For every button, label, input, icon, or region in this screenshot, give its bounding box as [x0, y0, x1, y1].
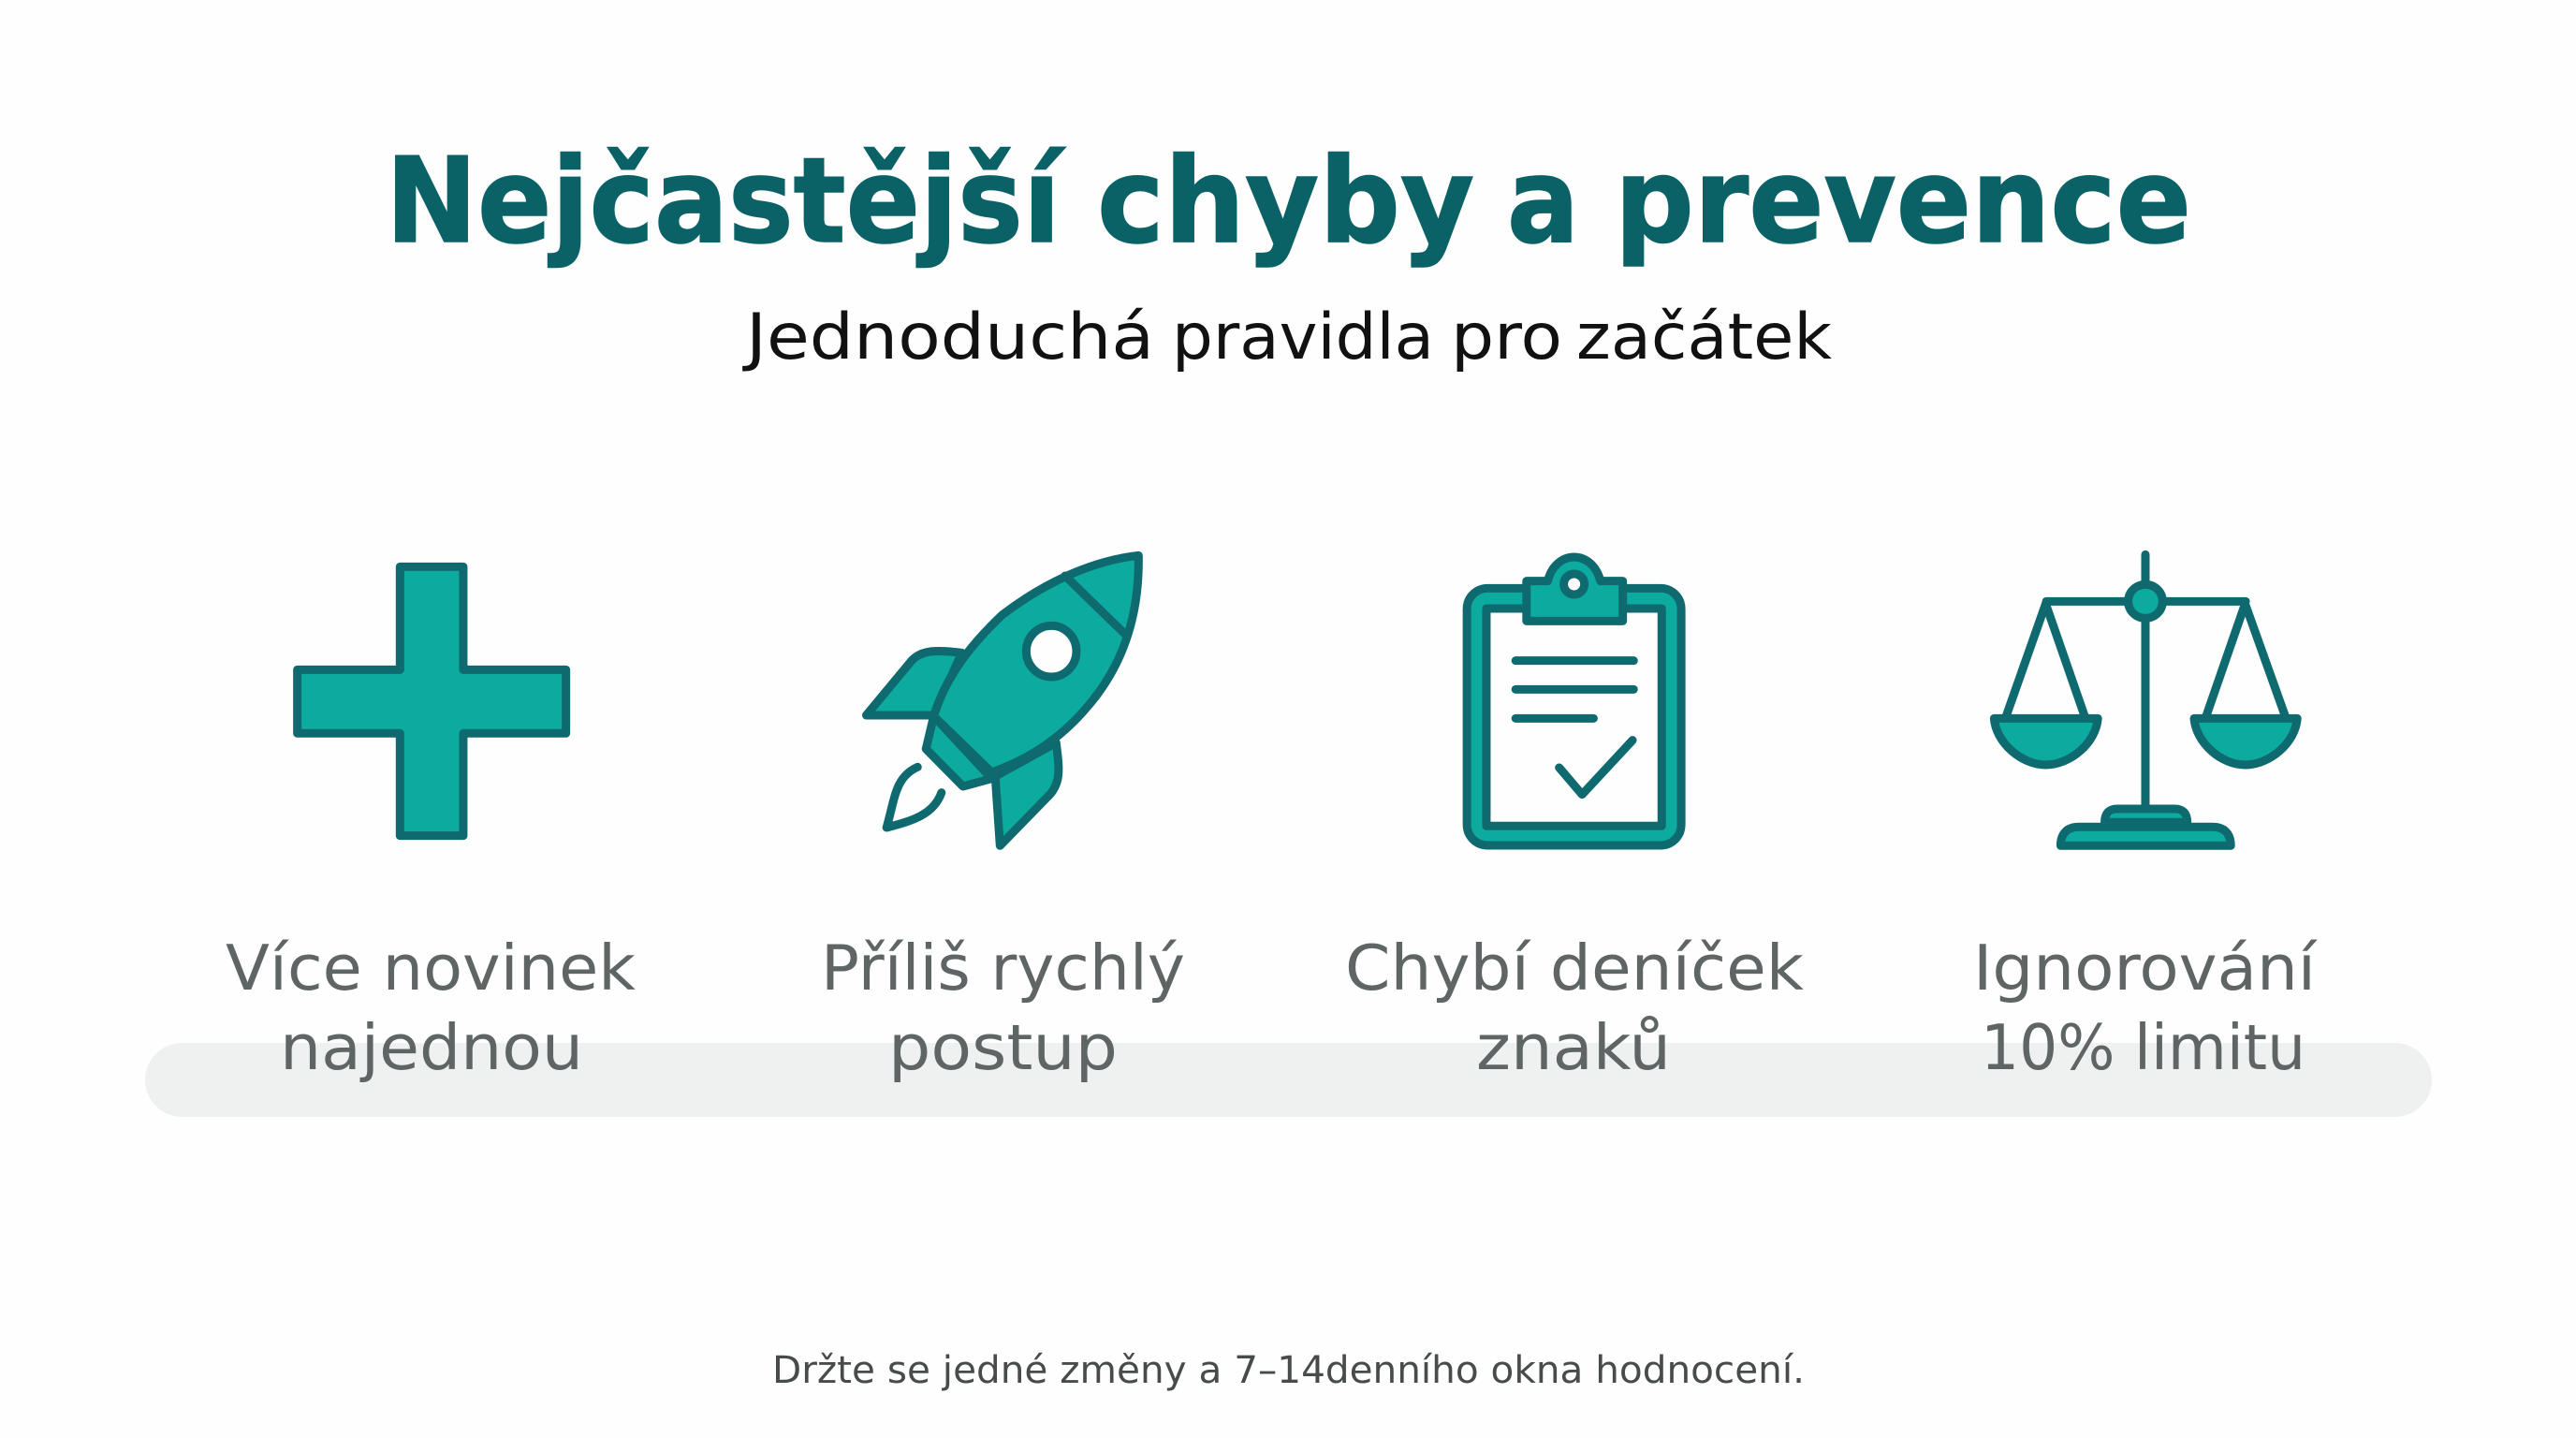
clipboard board	[1467, 588, 1681, 845]
label: Ignorování 10% limitu: Ignorování	[1973, 932, 2318, 1005]
label: Více novinek najednou: Více novinek	[226, 932, 636, 1005]
background bar behind labels	[145, 1043, 2432, 1117]
subtitle: začátek	[1576, 301, 1833, 374]
title	[386, 132, 2191, 270]
clipboard paper	[1486, 609, 1661, 826]
icon: rocket	[866, 555, 1138, 845]
rocket body	[934, 555, 1138, 772]
clipboard clip hole	[1564, 574, 1585, 594]
scales right pan	[2194, 718, 2297, 765]
scales left pan	[1994, 718, 2098, 765]
scales post and beam	[2046, 554, 2246, 807]
icon: clipboard	[1467, 557, 1681, 845]
label: Chybí deníček znaků: znaků	[1476, 1011, 1671, 1084]
rocket window	[1026, 625, 1076, 677]
rocket lower fin	[995, 742, 1059, 845]
subtitle: Jednoduchá	[742, 301, 1154, 374]
rocket nose line	[1065, 576, 1126, 635]
subtitle: pro	[1451, 301, 1562, 374]
label: Ignorování 10% limitu	[1973, 932, 2318, 1084]
icon: balance scales	[1994, 554, 2297, 845]
title: Nejčastější	[386, 132, 1065, 270]
label: Ignorování 10% limitu: 10% limitu	[1981, 1011, 2305, 1084]
label: Příliš rychlý postup: Příliš rychlý	[821, 932, 1185, 1005]
scales chains	[2006, 604, 2285, 716]
label: Příliš rychlý postup	[821, 932, 1185, 1084]
clipboard text lines	[1515, 661, 1633, 718]
title: chyby	[1097, 132, 1474, 270]
label: Více novinek najednou	[226, 932, 636, 1084]
footer note: Držte se jedné změny a 7–14denního okna hodnocení.	[772, 1349, 1805, 1392]
rocket flame	[886, 767, 942, 828]
title: prevence	[1615, 132, 2191, 270]
label: Příliš rychlý postup: postup	[888, 1011, 1118, 1084]
icon: plus	[298, 566, 566, 836]
scales base	[2105, 809, 2188, 822]
rocket left fin	[866, 651, 962, 715]
label: Chybí deníček znaků	[1345, 932, 1804, 1084]
subtitle	[742, 301, 1833, 374]
label: Více novinek najednou: najednou	[280, 1011, 583, 1084]
clipboard check mark	[1559, 741, 1632, 795]
label: Chybí deníček znaků: Chybí deníček	[1345, 932, 1804, 1005]
rocket nozzle	[926, 716, 991, 786]
title: a	[1507, 132, 1579, 270]
subtitle: pravidla	[1172, 301, 1434, 374]
scales pivot	[2129, 584, 2162, 618]
scales foot	[2060, 827, 2231, 845]
clipboard clip	[1527, 557, 1623, 621]
